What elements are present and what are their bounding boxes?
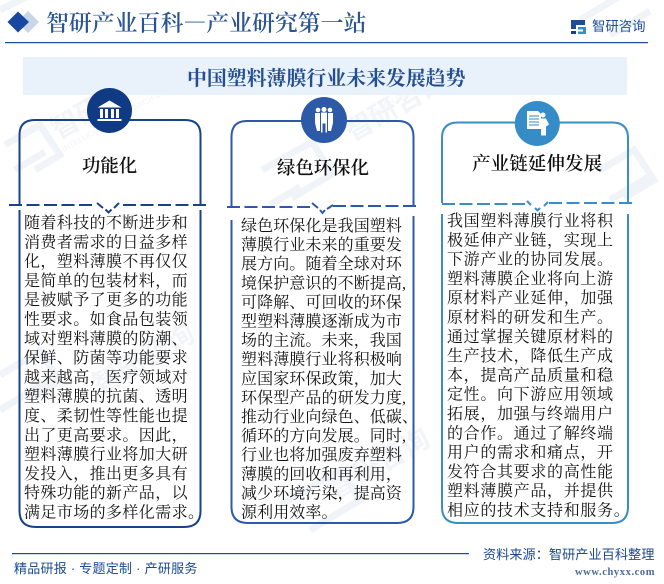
- brand name: 智研咨询: [592, 19, 646, 34]
- text block: 塑料薄膜的抗菌、透明: [24, 387, 188, 406]
- panel: 绿色环保化: [227, 97, 418, 523]
- text block: 发投入，推出更多具有: [24, 465, 188, 483]
- header rule: [5, 42, 648, 43]
- divider with notch: [9, 203, 209, 212]
- text block: 发符合其要求的高性能: [447, 462, 614, 481]
- source note: 资料来源：智研产业百科整理: [483, 547, 654, 562]
- text block: 性要求。如食品包装领: [24, 310, 189, 328]
- heading: 功能化: [82, 156, 137, 176]
- text: 智研: [46, 90, 110, 145]
- text block: 环保型产品的研发力度,: [241, 389, 406, 407]
- text block: 越来越高，医疗领域对: [24, 367, 188, 386]
- text block: [241, 217, 418, 522]
- heading: 绿色环保化: [277, 158, 369, 178]
- icon: three people: [301, 97, 347, 143]
- text block: 生产技术，降低生产成: [447, 347, 614, 365]
- divider with notch: [442, 201, 635, 210]
- text block: 行业也将加强废弃塑料: [241, 445, 402, 464]
- text block: 可降解、可回收的环保: [241, 293, 402, 311]
- text block: 场的主流。未来，我国: [241, 332, 402, 350]
- text block: 塑料薄膜行业将积极响: [241, 350, 402, 369]
- text block: 拓展，加强与终端用户: [447, 405, 614, 423]
- text block: 展方向。随着全球对环: [241, 255, 403, 273]
- text block: 型塑料薄膜逐渐成为市: [241, 312, 402, 330]
- text block: 化，塑料薄膜不再仅仅: [24, 253, 188, 271]
- icon: brand logo: [571, 20, 586, 34]
- text block: 相应的技术支持和服务。: [447, 502, 630, 520]
- text block: 原材料的研发和生产。: [447, 308, 614, 326]
- heading band: 中国塑料薄膜行业未来发展趋势: [187, 67, 466, 90]
- text block: 是简单的包装材料，而: [24, 272, 188, 290]
- text block: 推动行业向绿色、低碳、: [241, 408, 418, 426]
- text block: 薄膜行业未来的重要发: [241, 236, 402, 254]
- text: INTELLIGENCE RESEARCH GROUP: [302, 81, 424, 157]
- text block: [24, 214, 204, 522]
- text: INTELLIGENCE RESEARCH GROUP: [60, 78, 183, 154]
- text block: 境保护意识的不断提高,: [241, 273, 406, 292]
- source url: www.chyxx.com: [575, 567, 655, 578]
- text block: 源利用效率。: [241, 504, 338, 522]
- text block: 减少环境污染，提高资: [241, 483, 403, 502]
- text block: 消费者需求的日益多样: [24, 233, 188, 251]
- text block: 出了更高要求。因此，: [24, 425, 188, 444]
- text block: 下游产业的协同发展。: [447, 251, 614, 269]
- panel: 产业链延伸发展: [442, 101, 635, 523]
- panel: 功能化: [9, 88, 209, 527]
- text block: 度、柔韧性等性能也提: [24, 406, 188, 425]
- text block: 通过掌握关键原材料的: [447, 327, 614, 346]
- text block: 应国家环保政策，加大: [241, 370, 402, 388]
- text block: 本，提高产品质量和稳: [447, 365, 614, 384]
- text block: 我国塑料薄膜行业将积: [447, 212, 614, 230]
- text block: 特殊功能的新产品，以: [24, 484, 189, 502]
- icon: person with document: [515, 101, 560, 146]
- text block: 随着科技的不断进步和: [24, 214, 188, 232]
- footer rule: [12, 553, 469, 554]
- footer tagline: 精品研报 · 专题定制 · 产研服务: [14, 561, 198, 576]
- text block: 塑料薄膜产品，并提供: [447, 481, 614, 500]
- icon: bank building: [87, 88, 132, 133]
- text block: 薄膜的回收和再利用，: [241, 465, 402, 483]
- title: site header: 智研产业百科—产业研究第一站: [46, 5, 366, 38]
- text block: 保鲜、防菌等功能要求: [24, 348, 188, 367]
- text block: 极延伸产业链，实现上: [447, 230, 614, 249]
- text block: 域对塑料薄膜的防潮、: [24, 330, 188, 348]
- text block: 定性。向下游应用领域: [447, 386, 614, 404]
- text block: 是被赋予了更多的功能: [24, 291, 188, 309]
- text: 智研咨询: [340, 64, 452, 147]
- text block: 用户的需求和痛点，开: [447, 444, 614, 462]
- icon: header diamonds: [8, 11, 39, 33]
- divider with notch: [227, 203, 418, 213]
- text block: [447, 212, 630, 520]
- text block: 原材料产业延伸，加强: [447, 289, 614, 307]
- text block: 绿色环保化是我国塑料: [241, 217, 402, 235]
- text block: 塑料薄膜行业将加大研: [24, 446, 188, 464]
- text block: 的合作。通过了解终端: [447, 424, 614, 442]
- text: 智研咨询: [322, 422, 435, 505]
- heading: 产业链延伸发展: [472, 154, 603, 175]
- heading band: [23, 57, 627, 95]
- text block: 塑料薄膜企业将向上游: [447, 270, 614, 288]
- text block: 循环的方向发展。同时,: [241, 427, 406, 445]
- text block: 满足市场的多样化需求。: [24, 504, 204, 522]
- text: 智研咨询: [88, 317, 200, 400]
